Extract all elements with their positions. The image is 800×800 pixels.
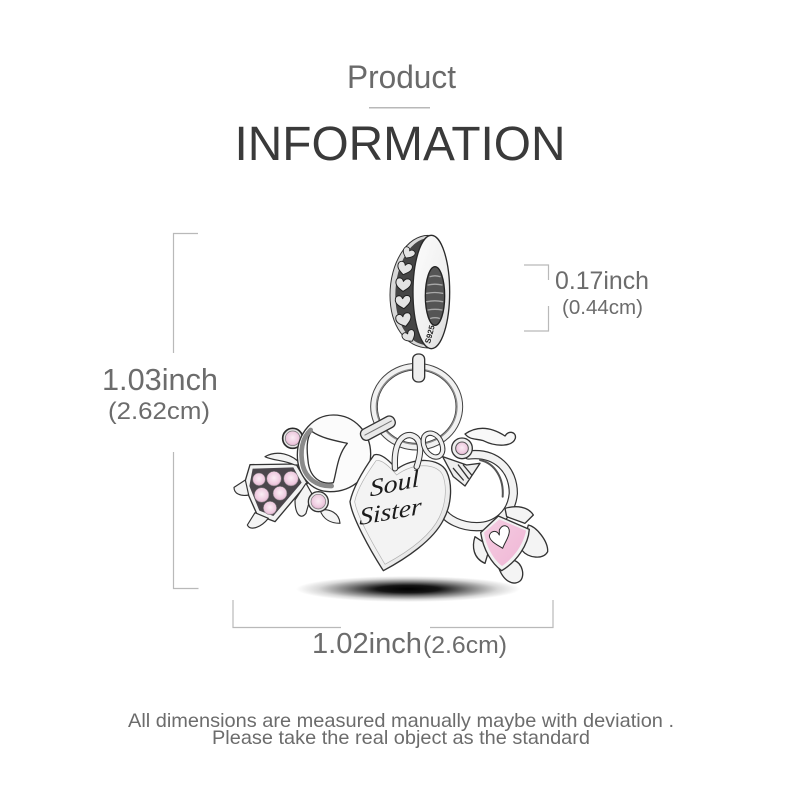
hole dimension [524,265,649,331]
width label [312,628,507,660]
connector loop [413,354,425,382]
height dimension [102,234,218,588]
width label: (2.6cm) [423,632,507,659]
pendant engraving: Sister [359,493,422,531]
right dress heart [489,526,509,548]
bail face [413,235,450,349]
heart loop [395,435,420,468]
hole label: (0.44cm) [562,297,643,319]
right loop [423,433,443,457]
bail [390,235,450,349]
right pink dress [481,516,529,571]
big ring [374,367,459,447]
width label: 1.02inch [312,628,422,660]
left figure [234,415,371,528]
shadow [296,576,520,602]
title [234,59,566,171]
bail hole [425,267,445,325]
disclaimer note: All dimensions are measured manually maybe with deviation . [128,710,674,732]
pendant engraving [359,465,422,531]
heading: INFORMATION: INFORMATION [234,118,566,171]
hole label: 0.17inch [555,267,649,295]
stamp 925: S925 [423,324,437,345]
right hand [443,457,480,486]
heading: Product: Product [347,59,456,95]
right hair [465,428,515,445]
left head ring [297,415,371,492]
left head inner rim [302,430,332,486]
left flower gems [283,428,328,512]
side loop [359,414,397,442]
disclaimer note [128,710,674,749]
left dress gems [253,471,298,515]
right feet and arm [473,507,548,583]
pendant engraving: Soul [369,465,420,503]
charm [234,235,548,583]
heart pattern [394,245,417,344]
left dress [244,464,307,522]
disclaimer note: Please take the real object as the standard [212,727,590,749]
right gem [452,438,472,459]
right figure [442,428,548,583]
hole label [555,267,649,319]
heart pendant [350,455,451,571]
height label: 1.03inch [102,362,218,397]
height label [102,362,218,425]
width dimension [233,600,553,660]
right head ring [442,455,513,527]
left arm and foot [234,453,340,528]
height label: (2.62cm) [108,398,210,425]
